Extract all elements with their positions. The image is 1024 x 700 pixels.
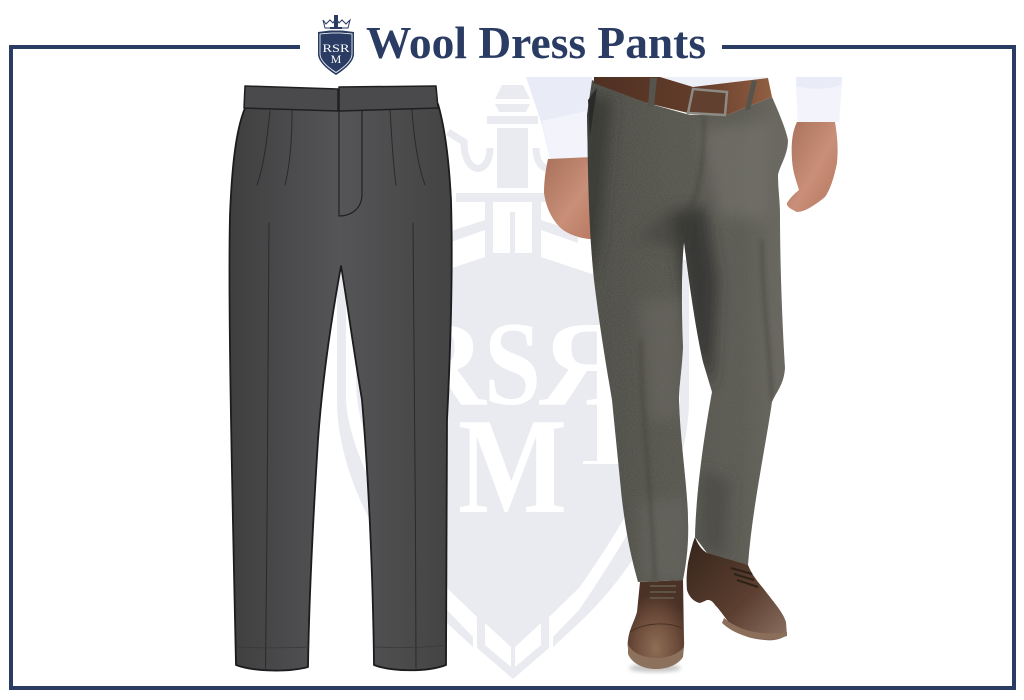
right shirt cuff [796,84,842,122]
icon: brand crest logo: M [331,52,342,66]
crest crossbar [448,193,578,243]
left shirt cuff [542,110,592,159]
rear shoe laces [731,568,758,587]
front shoe laces [650,586,676,598]
rear shoe sole [722,618,787,639]
rear shoe [687,537,787,640]
crest monogram [398,297,638,542]
pocket opening [588,88,597,136]
right shirt sleeve [796,77,842,122]
crest monogram: R [398,297,488,432]
crest crown hooks [448,132,578,168]
front shoe sole [628,644,684,669]
watermark crest [337,85,689,679]
trouser body [229,100,452,671]
icon: brand crest logo: RSR [322,41,350,55]
photo: man wearing wool trousers [526,75,842,672]
trousers [580,75,795,590]
crest shield body [356,202,670,679]
trouser shading [580,90,770,580]
front shoe [628,580,684,669]
crest outer band left [337,260,473,647]
fly placket [339,111,362,216]
shirt front [655,77,768,92]
left hand [544,157,601,239]
crest tower [487,85,538,188]
belt [594,77,772,115]
waistband [244,86,438,111]
shoe shadow [629,664,681,672]
belt loops [648,78,757,110]
crest outer band right [553,260,689,647]
icon: brand crest logo [318,15,354,75]
trouser base fabric [580,75,795,590]
crest monogram: R [538,297,628,432]
front shoe toe cap [630,624,682,632]
flat illustration: pleated trousers [229,86,452,671]
pleats and creases [237,110,446,668]
right hand [787,122,838,212]
belt buckle [688,89,727,115]
trouser creases [641,116,772,580]
title: Wool Dress Pants [366,18,706,68]
crest monogram: S [484,297,541,430]
left shirt sleeve [526,77,594,159]
crest monogram: M [458,390,567,542]
